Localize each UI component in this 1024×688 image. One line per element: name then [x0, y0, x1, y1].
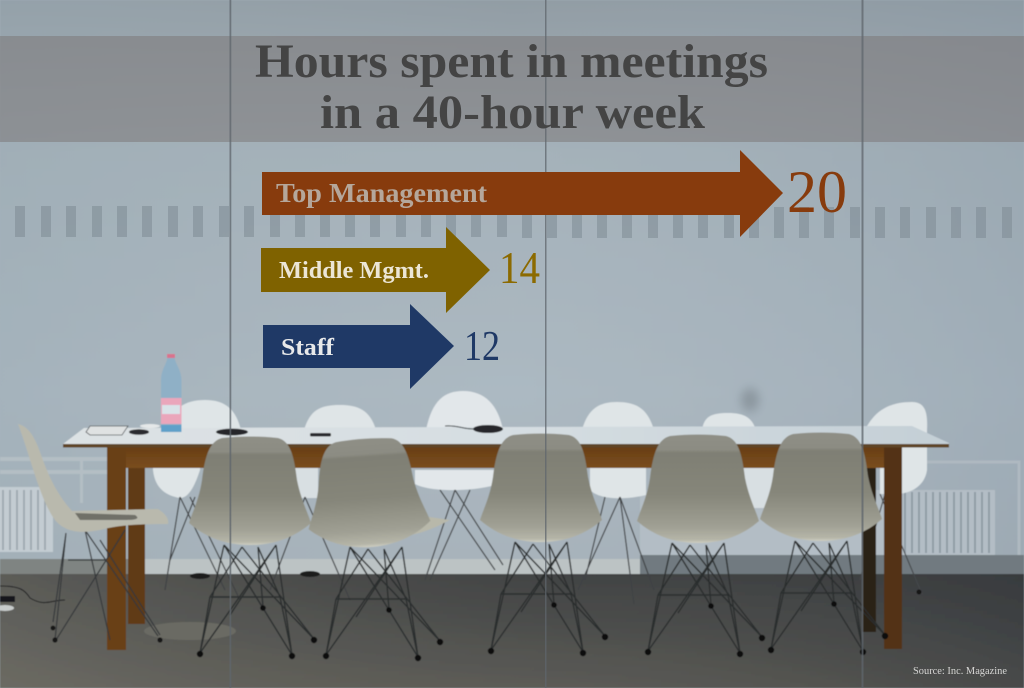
- back chair 1: [153, 400, 241, 600]
- frosted glass stripes: [15, 206, 1012, 238]
- value: 12: 12: [464, 324, 500, 370]
- front chair 2: [303, 435, 450, 661]
- side chair left: [18, 424, 168, 643]
- front chair 1: [189, 436, 317, 659]
- arrow: staff: Staff: [281, 335, 335, 361]
- radiator right: [640, 490, 995, 555]
- table legs front: [107, 446, 126, 650]
- table items: [86, 424, 503, 436]
- floor mat and cables: [0, 571, 320, 640]
- arrow: top management: [262, 150, 783, 237]
- front chair 4: [637, 434, 765, 657]
- table legs back: [128, 460, 145, 624]
- front chair 3: [480, 434, 608, 656]
- keyboard: [86, 426, 128, 435]
- conference phones: [216, 429, 248, 435]
- value: 14: 14: [499, 242, 540, 293]
- front chair 5: [760, 432, 888, 655]
- title band: [0, 36, 1024, 142]
- radiator left: [0, 487, 53, 552]
- source note: Source: Inc. Magazine: [913, 666, 1008, 677]
- title: Hours spent in meetings: [255, 35, 768, 88]
- value: 20: 20: [787, 159, 847, 225]
- glass panel edges: [230, 0, 864, 688]
- back chair 6: [860, 402, 927, 594]
- water bottle: [161, 354, 182, 432]
- arrow: top management: Top Management: [276, 178, 487, 208]
- wall pipes right: [925, 462, 1019, 556]
- table top: [63, 426, 949, 447]
- arrow: middle management: [261, 227, 490, 313]
- wall pipes left: [0, 457, 110, 503]
- back chair 2: [270, 405, 376, 600]
- table apron: [107, 444, 885, 468]
- arrow: staff: [263, 304, 454, 389]
- arrow: middle management: Middle Mgmt.: [279, 258, 429, 284]
- title: [255, 35, 768, 139]
- floor: [0, 574, 1024, 688]
- back row chairs: [153, 391, 927, 604]
- back chair 3: [415, 391, 503, 580]
- title: in a 40-hour week: [320, 86, 705, 139]
- baseboard: [140, 559, 640, 574]
- back chair 4: [578, 402, 654, 604]
- back chair 5: [702, 413, 776, 508]
